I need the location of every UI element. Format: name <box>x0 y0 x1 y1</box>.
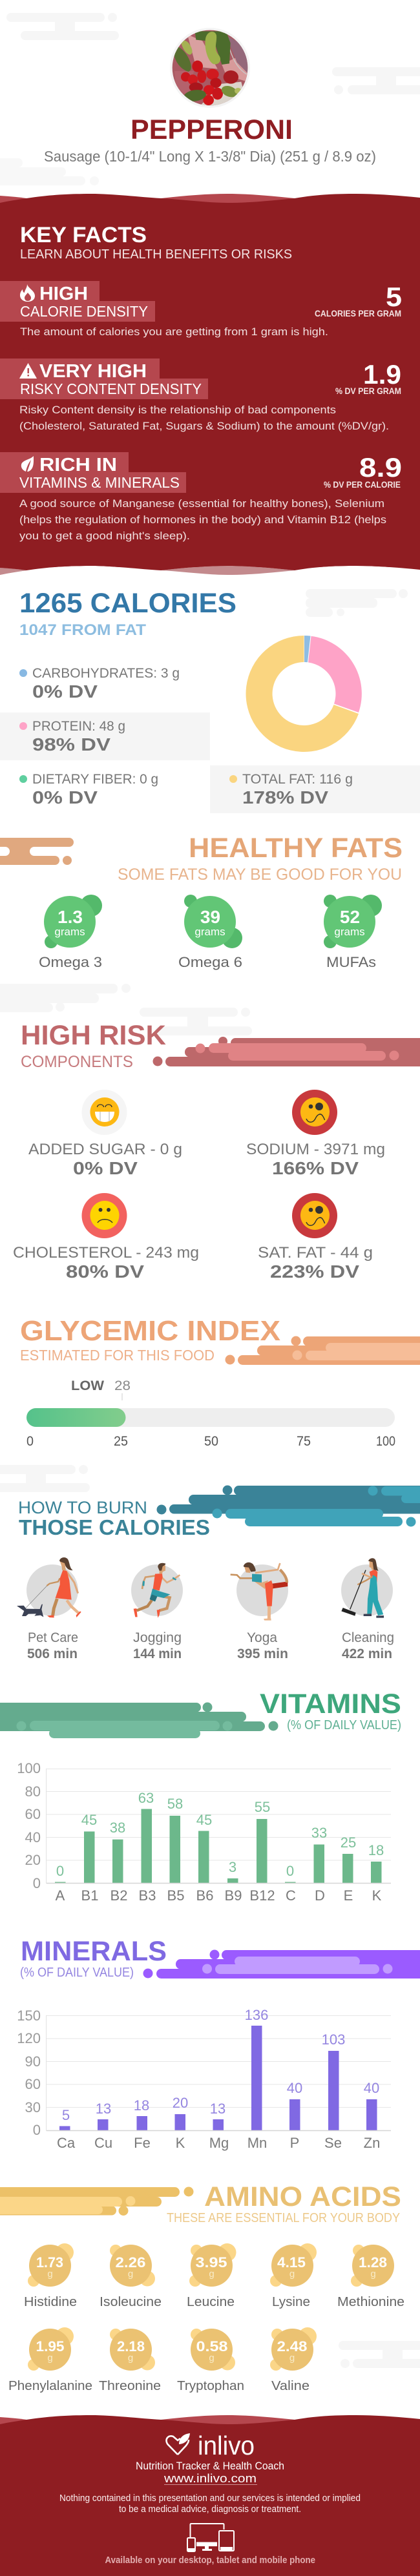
vitamins and minerals block: 8.9 <box>359 452 402 483</box>
minerals subheading: (% OF DAILY VALUE) <box>20 1966 134 1980</box>
bar chart: vitamins: 60 <box>25 1806 41 1822</box>
icon: confused face <box>300 1201 330 1230</box>
amino: threonine <box>99 2329 161 2393</box>
calorie density block <box>0 281 402 338</box>
icon: yoga pose <box>231 1563 288 1621</box>
bar chart: vitamins: 55 <box>255 1799 270 1815</box>
vitamins and minerals block <box>0 452 402 542</box>
amino: valine <box>270 2327 317 2393</box>
bar chart: minerals: 103 <box>322 2031 345 2048</box>
panel: footer <box>0 2415 420 2576</box>
risky content density block: Risky Content density is the relationship of bad components <box>19 404 336 416</box>
added sugar: 0% DV <box>73 1158 138 1178</box>
bar chart: minerals: 0 <box>33 2122 41 2138</box>
inlivo logo: inlivo <box>198 2431 255 2460</box>
amino acids heading: AMINO ACIDS <box>204 2181 401 2212</box>
decorative banner <box>156 1486 420 1527</box>
nutrient: dietary fiber <box>19 772 158 807</box>
icon: woman walking dog <box>17 1557 81 1617</box>
disclaimer: Nothing contained in this presentation and our services is intended or implied <box>59 2493 361 2504</box>
amino: threonine: 2.18 <box>117 2338 145 2354</box>
high risk heading: HIGH RISK <box>21 1020 166 1051</box>
calories from fat: 1047 FROM FAT <box>19 621 146 639</box>
bar chart: vitamins: A <box>56 1887 65 1904</box>
amino: phenylalanine: 1.95 <box>36 2338 65 2354</box>
amino: tryptophan: 0.58 <box>196 2338 227 2354</box>
healthy fats subheading: SOME FATS MAY BE GOOD FOR YOU <box>118 866 402 884</box>
panel: vitamins <box>0 1688 401 1904</box>
decorative banner <box>152 1037 420 1066</box>
bar chart: minerals: K <box>176 2135 185 2151</box>
decorative banner <box>0 1703 278 1738</box>
amino: threonine: Threonine <box>99 2379 161 2393</box>
amino: threonine: g <box>128 2353 133 2363</box>
vitamins heading: VITAMINS <box>260 1688 401 1719</box>
activity: cleaning: 422 min <box>342 1646 392 1661</box>
bar chart: vitamins: 0 <box>33 1875 41 1891</box>
calorie density block: 5 <box>386 282 402 312</box>
bar chart: minerals: 40 <box>364 2080 379 2096</box>
icon: sad face <box>90 1201 119 1230</box>
icon: flame <box>20 284 35 302</box>
bar chart: vitamins: 40 <box>25 1829 41 1845</box>
gauge scale: 75 <box>297 1434 311 1449</box>
bar chart: vitamins: 38 <box>110 1820 125 1836</box>
bar chart: minerals: 13 <box>210 2101 226 2117</box>
header panel <box>6 13 420 165</box>
nutrient: protein: PROTEIN: 48 g <box>32 719 125 734</box>
nutrient: protein: 98% DV <box>32 734 110 754</box>
bar chart: minerals: 20 <box>173 2095 188 2111</box>
nutrient: protein <box>0 712 210 760</box>
bar chart: vitamins: B6 <box>196 1887 213 1904</box>
panel: high risk components <box>0 984 420 1282</box>
bar chart: vitamins: 58 <box>167 1796 183 1812</box>
panel: amino acids <box>0 2181 420 2393</box>
nutrient: total fat: 178% DV <box>242 787 328 807</box>
omega 6: Omega 6 <box>178 954 242 970</box>
amino: phenylalanine <box>8 2327 92 2393</box>
cholesterol: CHOLESTEROL - 243 mg <box>13 1244 199 1262</box>
icon: confused face <box>300 1097 330 1127</box>
amino: valine: 2.48 <box>277 2338 308 2354</box>
gauge scale: 25 <box>114 1434 128 1449</box>
panel: key facts <box>0 194 420 579</box>
omega 3: Omega 3 <box>39 954 102 970</box>
background cloud left <box>0 158 99 185</box>
bar chart: minerals: 150 <box>17 2008 41 2024</box>
amino: valine: Valine <box>271 2379 310 2393</box>
nutrient: total fat <box>210 765 420 813</box>
food photo <box>170 28 250 108</box>
MUFAs <box>324 895 382 970</box>
icon: runner <box>134 1563 180 1618</box>
bar chart: vitamins: 25 <box>341 1834 356 1851</box>
bar chart: vitamins: B12 <box>249 1887 275 1904</box>
panel: how to burn calories <box>0 1465 420 1661</box>
donut chart <box>246 636 362 752</box>
healthy fats heading: HEALTHY FATS <box>189 833 403 864</box>
icon: woman sweeping <box>341 1558 384 1618</box>
activity: cleaning <box>341 1558 394 1661</box>
risky content density block: 1.9 <box>363 359 401 390</box>
calorie density block: The amount of calories you are getting from 1 gram is high. <box>20 326 328 338</box>
panel: healthy fats <box>0 833 403 970</box>
glycemic subheading: ESTIMATED FOR THIS FOOD <box>20 1347 215 1364</box>
amino: tryptophan: g <box>209 2353 215 2363</box>
sodium: SODIUM - 3971 mg <box>246 1141 385 1158</box>
bottom wave <box>0 562 420 579</box>
added sugar <box>28 1090 182 1178</box>
calorie density block: CALORIES PER GRAM <box>315 309 401 318</box>
nutrient: total fat: TOTAL FAT: 116 g <box>242 772 353 787</box>
bar chart: vitamins: 80 <box>25 1783 41 1800</box>
amino: isoleucine: g <box>128 2269 133 2280</box>
amino: isoleucine: Isoleucine <box>100 2295 162 2309</box>
bar chart: vitamins: E <box>344 1887 353 1904</box>
vitamins and minerals block: VITAMINS & MINERALS <box>19 474 180 491</box>
burn heading line 2: THOSE CALORIES <box>19 1515 210 1539</box>
bar chart: vitamins: B2 <box>110 1887 127 1904</box>
key facts heading: KEY FACTS <box>20 223 147 247</box>
disclaimer: to be a medical advice, diagnosis or treatment. <box>119 2504 301 2515</box>
amino: tryptophan: Tryptophan <box>177 2379 244 2393</box>
activity: yoga: 395 min <box>237 1646 288 1661</box>
bar chart: minerals: 60 <box>25 2076 41 2092</box>
gauge scale: 100 <box>376 1434 395 1449</box>
bar chart: vitamins: 20 <box>25 1852 41 1868</box>
top wave <box>0 194 420 207</box>
key facts subheading: LEARN ABOUT HEALTH BENEFITS OR RISKS <box>20 247 292 262</box>
vitamins and minerals block: RICH IN <box>39 455 117 475</box>
risky content density block <box>0 358 401 432</box>
added sugar: ADDED SUGAR - 0 g <box>28 1141 182 1158</box>
bar chart: minerals: 5 <box>62 2107 70 2123</box>
activity: jogging: 144 min <box>133 1646 182 1661</box>
amino acids subheading: THESE ARE ESSENTIAL FOR YOUR BODY <box>167 2211 400 2225</box>
amino: phenylalanine: g <box>47 2353 53 2363</box>
calorie density block: CALORIE DENSITY <box>20 303 148 320</box>
bar chart: vitamins: 18 <box>368 1842 384 1858</box>
bar chart: vitamins: B9 <box>225 1887 242 1904</box>
bar chart: minerals <box>17 2007 391 2151</box>
activity: pet care <box>17 1557 81 1661</box>
risky content density block: RISKY CONTENT DENSITY <box>20 380 202 397</box>
availability note: Available on your desktop, tablet and mobile phone <box>105 2555 315 2566</box>
gauge value <box>71 1378 131 1400</box>
background cloud <box>339 2341 420 2368</box>
saturated fat: SAT. FAT - 44 g <box>258 1244 373 1262</box>
sodium: 166% DV <box>272 1158 359 1178</box>
icon: grinning face <box>90 1097 119 1127</box>
amino: leucine: g <box>209 2269 215 2280</box>
amino: methionine <box>337 2245 404 2309</box>
decorative banner <box>0 2187 194 2216</box>
activity: pet care: 506 min <box>27 1646 78 1661</box>
gauge value: 28 <box>114 1378 131 1393</box>
bar chart: minerals: 136 <box>245 2007 268 2023</box>
serving size subtitle: Sausage (10-1/4" Long X 1-3/8" Dia) (251 g / 8.9 oz) <box>44 148 376 165</box>
calories heading: 1265 CALORIES <box>19 588 236 619</box>
omega 3 <box>39 895 102 970</box>
background clouds <box>0 984 252 1035</box>
activity: yoga <box>231 1563 288 1661</box>
gauge value: LOW <box>71 1378 104 1393</box>
vitamins and minerals block: A good source of Manganese (essential for healthy bones), Selenium <box>19 497 384 510</box>
icon: leaf <box>21 456 34 472</box>
bar chart: minerals: Ca <box>57 2135 76 2151</box>
sodium <box>246 1090 385 1178</box>
omega 3: grams <box>54 926 85 938</box>
bar chart: vitamins: 0 <box>56 1863 64 1879</box>
title: PEPPERONI <box>131 114 293 145</box>
amino: leucine: Leucine <box>187 2295 235 2309</box>
bar chart: vitamins: B1 <box>81 1887 98 1904</box>
bar chart: minerals: Zn <box>364 2135 380 2151</box>
amino: histidine <box>24 2243 77 2309</box>
vitamins and minerals block: % DV PER CALORIE <box>324 480 401 490</box>
bar chart: minerals: Se <box>324 2135 342 2151</box>
activity: jogging <box>131 1563 183 1661</box>
footer wave <box>0 2415 420 2428</box>
saturated fat: 223% DV <box>270 1262 359 1282</box>
risky content density block: % DV PER GRAM <box>335 386 401 396</box>
background cloud right <box>332 67 420 94</box>
amino: methionine: g <box>370 2269 376 2280</box>
amino: lysine <box>270 2243 317 2309</box>
website: www.inlivo.com <box>163 2472 257 2485</box>
bar chart: vitamins: D <box>315 1887 325 1904</box>
bar chart: minerals: 90 <box>25 2053 41 2070</box>
amino: histidine: g <box>47 2269 53 2280</box>
bar chart: minerals: 40 <box>287 2080 302 2096</box>
bar chart: vitamins: K <box>372 1887 382 1904</box>
panel: calories <box>0 588 420 813</box>
nutrient: carbohydrates <box>19 666 180 701</box>
bar chart: minerals: Mg <box>209 2135 229 2151</box>
glycemic index heading: GLYCEMIC INDEX <box>20 1315 280 1347</box>
omega 6: grams <box>194 926 226 938</box>
omega 3: 1.3 <box>58 907 83 927</box>
MUFAs: 52 <box>340 907 360 927</box>
bar chart: minerals: Mn <box>247 2135 267 2151</box>
panel: minerals <box>17 1936 420 2151</box>
bar chart: minerals: P <box>290 2135 299 2151</box>
bar chart: vitamins: B3 <box>139 1887 156 1904</box>
MUFAs: MUFAs <box>326 954 376 970</box>
vitamins subheading: (% OF DAILY VALUE) <box>287 1718 401 1732</box>
gauge scale: 50 <box>204 1434 218 1449</box>
amino: leucine: 3.95 <box>195 2254 227 2270</box>
vitamins and minerals block: (helps the regulation of hormones in the body) and Vitamin B12 (helps <box>19 514 386 526</box>
amino: isoleucine <box>100 2245 162 2309</box>
amino: lysine: Lysine <box>272 2295 310 2309</box>
gauge scale: 0 <box>26 1434 34 1449</box>
bar chart: minerals: 18 <box>134 2097 149 2114</box>
bar chart: vitamins: B5 <box>167 1887 184 1904</box>
burn heading line 1: HOW TO BURN <box>18 1498 147 1517</box>
MUFAs: grams <box>334 926 365 938</box>
bar chart: vitamins: 3 <box>229 1859 236 1875</box>
amino: lysine: 4.15 <box>277 2254 306 2270</box>
nutrient: carbohydrates: 0% DV <box>32 681 98 701</box>
bar chart: vitamins: 63 <box>138 1790 154 1806</box>
amino: methionine: 1.28 <box>359 2254 387 2270</box>
bar chart: vitamins: 33 <box>311 1825 327 1841</box>
activity: jogging: Jogging <box>133 1630 182 1645</box>
nutrient: dietary fiber: DIETARY FIBER: 0 g <box>32 772 158 787</box>
amino: phenylalanine: Phenylalanine <box>8 2379 92 2393</box>
amino: lysine: g <box>289 2269 295 2280</box>
activity: pet care: Pet Care <box>28 1630 78 1645</box>
bar chart: minerals: 120 <box>17 2030 41 2046</box>
decorative banner <box>0 838 74 865</box>
inlivo logo <box>167 2431 255 2460</box>
bar chart: vitamins: C <box>286 1887 296 1904</box>
background cloud <box>0 1465 90 1492</box>
amino: leucine <box>187 2243 236 2309</box>
bar chart: minerals: 13 <box>96 2101 111 2117</box>
decorative banner <box>225 1336 420 1365</box>
bar chart: vitamins <box>17 1760 391 1904</box>
minerals heading: MINERALS <box>21 1936 167 1967</box>
bar chart: vitamins: 45 <box>81 1812 97 1828</box>
amino: histidine: Histidine <box>24 2295 77 2309</box>
gauge bar <box>26 1408 395 1427</box>
tagline: Nutrition Tracker & Health Coach <box>136 2460 284 2472</box>
background cloud top left <box>6 13 119 40</box>
bar chart: minerals: Cu <box>94 2135 112 2151</box>
panel: glycemic index <box>20 1315 420 1449</box>
bar chart: vitamins: 45 <box>196 1812 212 1828</box>
omega 6 <box>178 895 242 970</box>
bar chart: minerals: 30 <box>25 2099 41 2115</box>
vitamins and minerals block: you to get a good night's sleep). <box>19 530 190 542</box>
nutrient: dietary fiber: 0% DV <box>32 787 98 807</box>
activity: yoga: Yoga <box>247 1630 277 1645</box>
bar chart: vitamins: 0 <box>286 1863 294 1879</box>
components subheading: COMPONENTS <box>21 1053 133 1071</box>
disclaimer <box>59 2493 361 2515</box>
nutrient: carbohydrates: CARBOHYDRATES: 3 g <box>32 666 180 681</box>
amino: valine: g <box>289 2353 295 2363</box>
bar chart: minerals: Fe <box>134 2135 151 2151</box>
activity: cleaning: Cleaning <box>342 1630 394 1645</box>
amino: tryptophan <box>177 2329 244 2393</box>
risky content density block: (Cholesterol, Saturated Fat, Sugars & Sodium) to the amount (%DV/gr). <box>19 420 389 432</box>
calorie density block: HIGH <box>39 284 88 304</box>
background cloud <box>306 589 408 617</box>
saturated fat <box>258 1193 373 1282</box>
cholesterol <box>13 1193 199 1282</box>
decorative banner <box>143 1949 420 1979</box>
icon: devices <box>187 2524 234 2551</box>
gauge scale <box>26 1434 395 1449</box>
amino: histidine: 1.73 <box>36 2254 63 2270</box>
omega 6: 39 <box>200 907 220 927</box>
amino: isoleucine: 2.26 <box>115 2254 146 2270</box>
bar chart: vitamins: 100 <box>17 1760 41 1776</box>
cholesterol: 80% DV <box>66 1262 144 1282</box>
amino: methionine: Methionine <box>337 2295 404 2309</box>
icon: warning triangle <box>19 363 37 379</box>
risky content density block: VERY HIGH <box>39 361 147 382</box>
